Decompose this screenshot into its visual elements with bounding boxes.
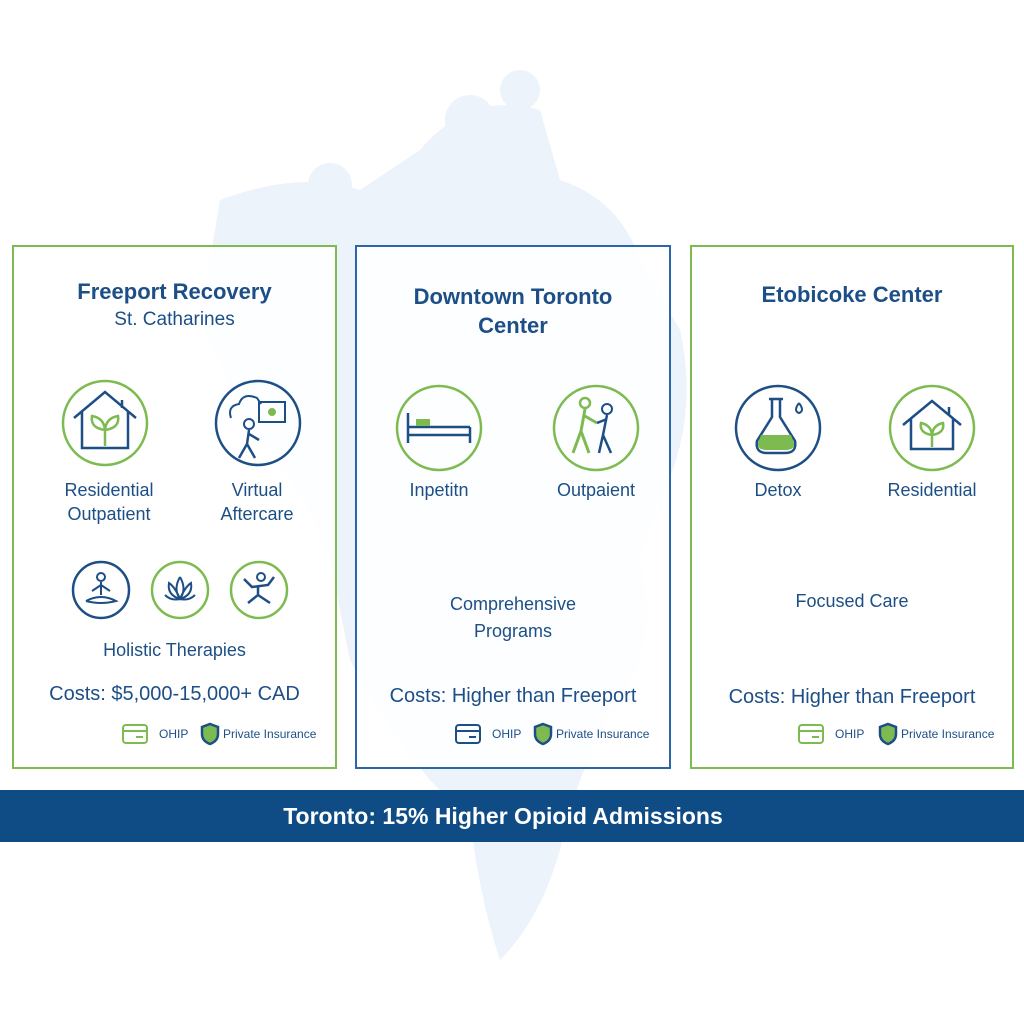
insurance badges: Private Insurance [556,727,649,741]
label: residential: Residential [887,480,977,500]
comprehensive programs: Comprehensive [450,594,576,614]
icon: outpatient helping [552,384,640,472]
label: outpatient: Outpaient [557,480,635,500]
banner: Toronto opioid admissions: Toronto: 15% Higher Opioid Admissions [283,803,723,829]
panel: Etobicoke Center [690,245,1014,769]
insurance badges: OHIP [835,727,864,741]
icon: lotus [150,560,210,620]
icon: meditation [72,560,130,620]
icons: holistic therapies [72,560,288,620]
panel: Downtown Toronto Center [355,245,671,769]
insurance badges: OHIP [492,727,521,741]
comprehensive programs: Programs [474,621,552,641]
title: Freeport Recovery [77,279,272,304]
label: virtual aftercare [220,480,294,524]
icon: bed [396,384,482,472]
label: residential outpatient [64,480,154,524]
label: residential outpatient: Outpatient [67,504,151,524]
insurance badges: Private Insurance [901,727,994,741]
insurance badges [455,722,649,746]
banner: Toronto opioid admissions [0,790,1024,842]
icon: house with leaf [62,380,148,466]
label: virtual aftercare: Virtual [232,480,282,500]
comprehensive programs [450,594,576,641]
icon: residential house [888,384,976,472]
title: Etobicoke Center [762,282,942,307]
label: detox: Detox [754,480,802,500]
insurance badges: Private Insurance [223,727,316,741]
costs: Costs: Higher than Freeport [729,686,975,708]
title: Center [478,313,548,338]
title [414,284,612,338]
icon: virtual aftercare [214,380,302,466]
costs: Costs: $5,000-15,000+ CAD [49,683,300,705]
icon: tai chi [230,560,288,620]
costs: Costs: Higher than Freeport [390,685,636,707]
label: virtual aftercare: Aftercare [220,504,294,524]
panel: Freeport Recovery [12,245,337,769]
label: inpatient: Inpetitn [409,480,469,500]
subtitle: St. Catharines [114,309,235,330]
insurance badges [122,722,316,746]
focused care: Focused Care [795,591,909,611]
label: holistic therapies: Holistic Therapies [103,640,246,660]
insurance badges: OHIP [159,727,188,741]
title: Downtown Toronto [414,284,612,309]
label: residential outpatient: Residential [64,480,154,500]
insurance badges [798,722,994,746]
icon: detox flask [734,384,822,472]
